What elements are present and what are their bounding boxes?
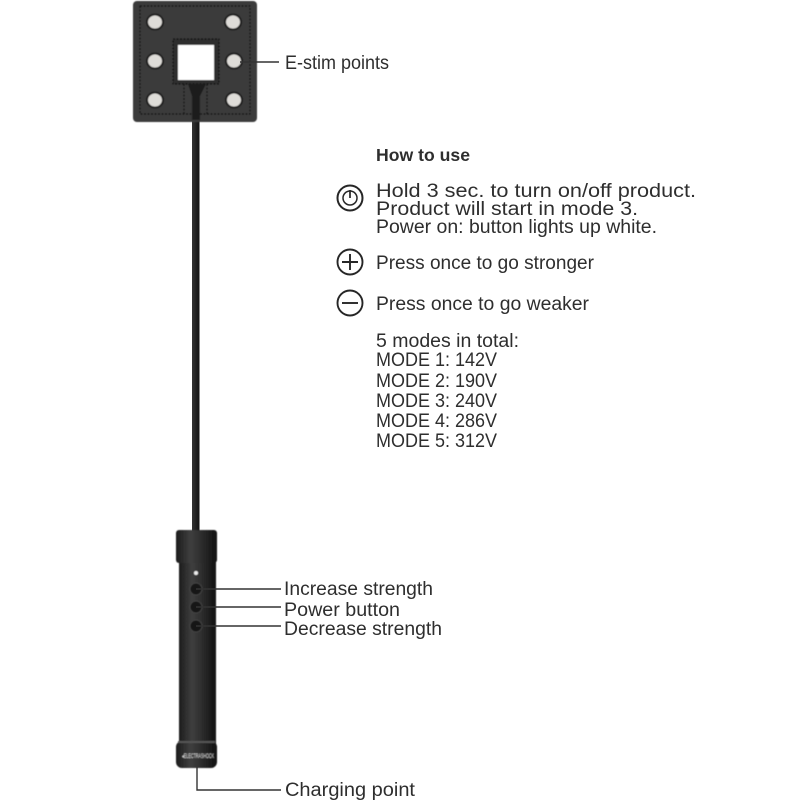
icon: power (338, 186, 362, 210)
icon: plus (338, 250, 362, 274)
rod (192, 120, 200, 532)
text: modes list: MODE 3: 240V (376, 391, 497, 412)
text: power instructions (376, 181, 696, 238)
text: modes list: 5 modes in total: (376, 331, 519, 352)
icon: minus (338, 290, 362, 316)
text: modes list: MODE 2: 190V (376, 371, 497, 392)
heading: How to use: How to use (376, 145, 470, 165)
text: press to go weaker: Press once to go weaker (376, 294, 590, 315)
label: Decrease strength: Decrease strength (284, 619, 442, 640)
text: power instructions: Hold 3 sec. to turn on/off product. (376, 181, 696, 202)
text: press to go stronger: Press once to go stronger (376, 253, 595, 274)
label: E-stim points: E-stim points (285, 53, 389, 74)
text: modes list: MODE 4: 286V (376, 411, 497, 432)
leader lines (196, 62, 281, 790)
text: modes list (376, 331, 519, 452)
logo: ◂ELECTRASHOCK (182, 754, 214, 760)
label: Power button: Power button (284, 600, 400, 621)
icon: metal studs (147, 14, 242, 108)
text: modes list: MODE 5: 312V (376, 431, 497, 452)
text: power instructions: Power on: button lights up white. (376, 217, 657, 238)
text: modes list: MODE 1: 142V (376, 350, 497, 371)
handle (176, 530, 217, 768)
paddle head (133, 1, 257, 122)
text: power instructions: Product will start in mode 3. (376, 199, 638, 220)
label: Increase strength: Increase strength (284, 579, 433, 600)
